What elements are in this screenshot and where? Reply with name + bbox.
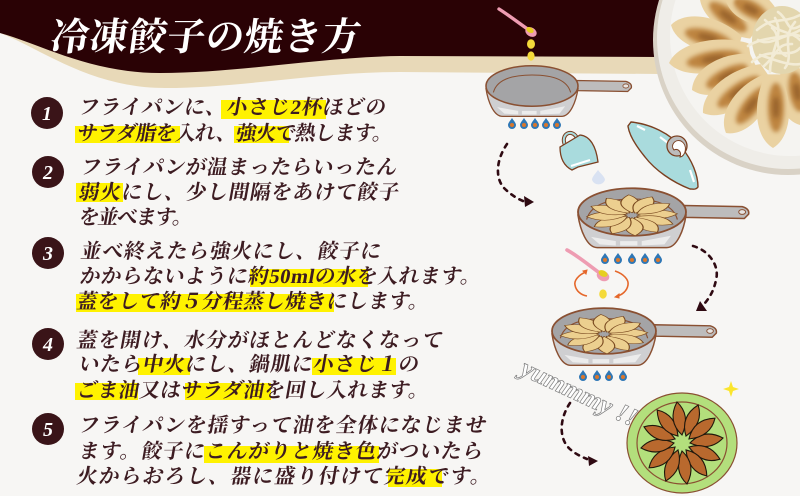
arrow: pan 2 to pan 3 [693, 246, 717, 311]
gyoza [666, 0, 800, 148]
number badge 2 [32, 156, 64, 188]
step 3 text: かからないように約50mlの水を入れます。 [78, 265, 483, 288]
step 3 text: 蓋をして約５分程蒸し焼きにします。 [75, 290, 431, 313]
step 5 [32, 413, 493, 488]
highlights [204, 446, 442, 487]
icon: finished gyoza on green plate [627, 393, 737, 493]
step 1 text: フライパンに、小さじ2杯ほどの [77, 96, 388, 119]
number badge 2: 2 [42, 162, 53, 184]
number badge 3 [32, 237, 64, 269]
step 5 text: フライパンを揺すって油を全体になじませ [77, 414, 488, 437]
icon: spoon with oil and swirl arrows [567, 250, 628, 299]
step 2 text: フライパンが温まったらいったん [79, 156, 399, 179]
step 1 text [75, 96, 395, 145]
step 1 text: サラダ脂を入れ、強火で熱します。 [75, 122, 395, 145]
highlights [75, 100, 326, 143]
icon: burner flames 3 [579, 370, 627, 381]
number badge 5: 5 [43, 419, 53, 441]
step 1 [31, 96, 395, 145]
arrow: pan 3 to plate [562, 403, 598, 466]
step 3 text [75, 240, 483, 313]
icon: pan with gyoza [578, 188, 749, 248]
highlight [76, 183, 123, 202]
number badge 5 [32, 413, 64, 445]
step 5 text: ます。餃子にこんがりと焼き色がついたら [77, 440, 485, 463]
step 4 text: いたら中火にし、鍋肌に小さじ１の [77, 353, 421, 376]
number badge 3: 3 [42, 243, 53, 265]
step 4 [32, 328, 445, 402]
icon: pan lid [628, 122, 698, 189]
step 2 text: 弱火にし、少し間隔をあけて餃子 [77, 181, 401, 204]
icon: burner flames 1 [508, 118, 561, 129]
step 4 text [75, 329, 445, 402]
number badge 1: 1 [42, 103, 52, 125]
step 5 text [75, 414, 493, 488]
icon: burner flames 2 [601, 253, 662, 264]
icon: pan with gyoza and oil [552, 308, 716, 365]
highlights [76, 269, 368, 312]
icon: water pitcher [560, 133, 605, 184]
step 3 text: 並べ終えたら強火にし、餃子に [79, 240, 383, 263]
icon: sparkle [723, 381, 739, 397]
arrow: pan 1 to pan 2 [498, 144, 534, 207]
photo: plate of gyoza [653, 0, 800, 175]
bean sprouts [748, 6, 800, 74]
step 2 text [77, 156, 401, 229]
number badge 4 [32, 328, 64, 360]
step 4 text: ごま油又はサラダ油を回し入れます。 [75, 379, 431, 402]
step 3 [32, 237, 483, 313]
icon: empty frying pan [486, 66, 631, 116]
highlights [75, 358, 396, 400]
title: 冷凍餃子の焼き方 [48, 16, 364, 59]
step 2 [32, 156, 401, 229]
number badge 4: 4 [42, 334, 53, 356]
step 2 text: を並べます。 [77, 206, 195, 229]
step 5 text: 火からおろし、器に盛り付けて完成です。 [75, 464, 493, 488]
plate [653, 0, 800, 175]
icon: spoon pouring oil [499, 9, 538, 61]
header banner [0, 0, 660, 88]
step 4 text: 蓋を開け、水分がほとんどなくなって [75, 329, 445, 352]
number badge 1 [31, 97, 63, 129]
lettering: Yummy: yummmy !! [514, 352, 642, 432]
